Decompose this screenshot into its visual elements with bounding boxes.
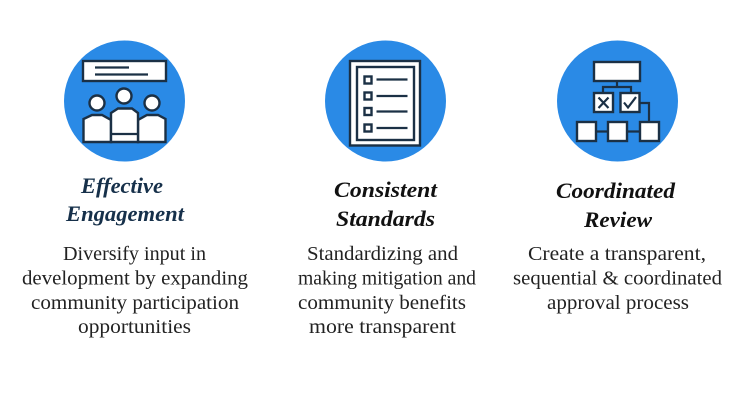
- text: consistent standards description: Standardizing and: [307, 244, 458, 265]
- heading: coordinated review: Coordinated: [556, 178, 676, 203]
- heading: consistent standards: Standards: [336, 206, 435, 231]
- text: effective engagement description: Diversify input in: [63, 244, 206, 265]
- text: consistent standards description: more transparent: [309, 317, 457, 338]
- column: coordinated review: [513, 40, 722, 314]
- icon: approval flowchart: [557, 40, 678, 162]
- heading: effective engagement: Effective: [80, 173, 163, 198]
- text: effective engagement description: development by expanding: [22, 268, 248, 290]
- column: effective engagement: [22, 40, 248, 338]
- heading: consistent standards: [334, 177, 438, 231]
- text: effective engagement description: community participation: [31, 293, 239, 314]
- heading: effective engagement: Engagement: [65, 201, 185, 226]
- icon: checklist document: [325, 40, 446, 162]
- text: effective engagement description: [22, 244, 248, 338]
- text: coordinated review description: sequential & coordinated: [513, 268, 722, 290]
- text: consistent standards description: making mitigation and: [298, 268, 476, 290]
- text: coordinated review description: [513, 244, 722, 314]
- text: consistent standards description: community benefits: [298, 293, 466, 314]
- heading: effective engagement: [65, 173, 185, 226]
- text: effective engagement description: opportunities: [78, 317, 191, 338]
- text: coordinated review description: approval process: [547, 293, 689, 314]
- text: consistent standards description: [298, 244, 476, 338]
- text: coordinated review description: Create a transparent,: [528, 244, 706, 265]
- icon: audience and presentation board: [64, 40, 185, 162]
- heading: coordinated review: Review: [583, 207, 652, 232]
- heading: coordinated review: [556, 178, 676, 232]
- column: consistent standards: [298, 40, 476, 338]
- heading: consistent standards: Consistent: [334, 177, 438, 202]
